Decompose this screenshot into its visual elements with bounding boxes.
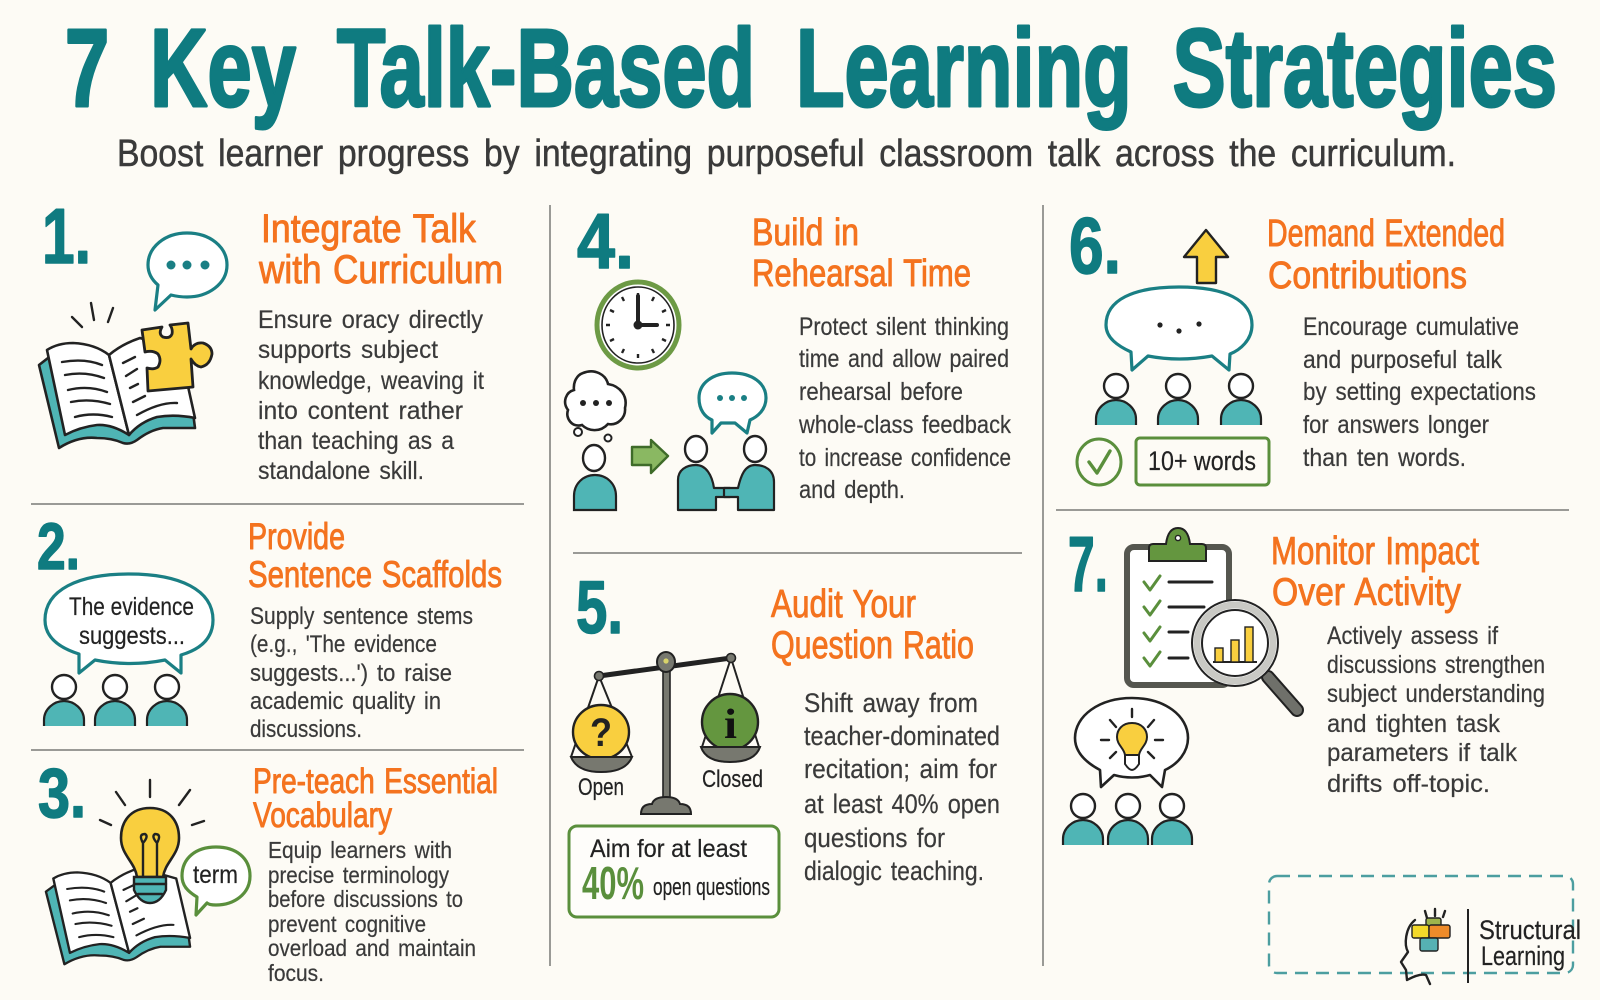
body text: discussions. [250, 716, 362, 743]
icon: learner thinking [574, 445, 616, 510]
body text: Equip learners with [268, 837, 452, 863]
body text: whole-class feedback [798, 411, 1011, 439]
arrow: yellow up [1184, 230, 1228, 283]
body text: at least 40% open [804, 789, 1000, 819]
heading: Contributions [1268, 255, 1467, 297]
callout: 40 percent target: Aim for at least [590, 835, 747, 863]
icon: green check [1077, 439, 1121, 485]
body text: overload and maintain [268, 935, 476, 961]
body text: and purposeful talk [1303, 346, 1502, 374]
icon: three learners [1063, 794, 1192, 845]
heading: Demand Extended [1267, 213, 1505, 255]
callout: 10+ words: 10+ words [1148, 446, 1256, 476]
body text: to increase confidence [799, 444, 1011, 472]
body text: Shift away from [804, 688, 978, 718]
body text: academic quality in [250, 688, 441, 715]
icon: term bubble [182, 847, 250, 915]
body text [804, 688, 1000, 886]
callout: 10+ words [1136, 438, 1269, 485]
callout: 40 percent target [569, 826, 779, 917]
heading [771, 583, 974, 667]
label: Open: Open [578, 774, 624, 801]
logo wordmark: Structural [1479, 915, 1581, 945]
panel: strategy 5 [569, 566, 1000, 917]
icon: pair of learners talking [678, 436, 774, 510]
body text: and depth. [799, 476, 905, 504]
icon: thought cloud [565, 371, 626, 442]
body text: suggests...') to raise [250, 660, 452, 687]
logo wordmark [1479, 915, 1581, 971]
callout: 40 percent target: 40% [582, 857, 644, 909]
body text [258, 306, 484, 485]
body text: by setting expectations [1303, 378, 1536, 406]
icon: clock [597, 282, 679, 368]
body text: than ten words. [1303, 444, 1466, 472]
heading [1271, 530, 1479, 614]
panel: strategy 1 [39, 192, 503, 485]
label: Closed: Closed [702, 766, 763, 793]
body text: drifts off-topic. [1327, 770, 1490, 798]
body text: parameters if talk [1327, 739, 1517, 767]
body text: and tighten task [1327, 710, 1500, 738]
icon: speech bubble with dots [699, 373, 766, 433]
icon: bubble with idea bulb [1075, 698, 1188, 787]
panel: strategy 7 [1063, 520, 1545, 845]
body text: dialogic teaching. [804, 856, 984, 886]
body text: precise terminology [268, 862, 449, 888]
body text: Encourage cumulative [1303, 313, 1519, 341]
icon: clipboard with magnifier [1127, 528, 1297, 710]
number 1: 1. [42, 192, 91, 280]
body text [1303, 313, 1536, 472]
body text: (e.g., 'The evidence [250, 631, 437, 658]
body text: supports subject [258, 336, 438, 364]
heading: with Curriculum [258, 248, 503, 292]
heading [752, 212, 971, 295]
icon: three learners [44, 675, 187, 726]
heading: Monitor Impact [1271, 530, 1479, 573]
number 7: 7. [1068, 520, 1108, 608]
body text: Protect silent thinking [799, 313, 1009, 341]
heading: Provide [248, 516, 345, 557]
body text: than teaching as a [258, 427, 454, 455]
heading [253, 762, 498, 835]
heading: Rehearsal Time [752, 253, 971, 295]
number 5: 5. [576, 566, 623, 649]
body text: recitation; aim for [804, 754, 997, 784]
body text: before discussions to [268, 886, 463, 912]
body text: subject understanding [1327, 680, 1545, 708]
icon: balance scale: ? [590, 711, 612, 755]
body text: discussions strengthen [1327, 651, 1545, 679]
body text: for answers longer [1303, 411, 1489, 439]
heading: Vocabulary [253, 796, 392, 835]
icon: large speech bubble [1106, 287, 1252, 370]
icon: term bubble: term [193, 861, 238, 889]
callout: 40 percent target: open questions [653, 874, 770, 901]
icon: speech bubble [148, 233, 227, 310]
icon: speech bubble with sentence stem: The evidence [69, 593, 194, 621]
icon: speech bubble with sentence stem [45, 574, 213, 673]
icon: head with blocks [1401, 909, 1450, 984]
body text: Actively assess if [1327, 622, 1498, 650]
body text: prevent cognitive [268, 911, 426, 937]
body text [798, 313, 1011, 504]
heading: Audit Your [771, 583, 916, 626]
body text [1327, 622, 1545, 798]
subtitle: Boost learner progress by integrating purposeful classroom talk across the curriculum. [117, 133, 1456, 175]
icon: balance scale: i [724, 702, 737, 748]
body text: Ensure oracy directly [258, 306, 483, 334]
heading: Sentence Scaffolds [248, 554, 502, 595]
panel: strategy 2 [37, 509, 502, 743]
body text [250, 603, 473, 743]
panel: Structural Learning logo [1269, 876, 1581, 984]
body text: time and allow paired [799, 345, 1009, 373]
heading [1267, 213, 1505, 297]
icon: balance scale [571, 652, 760, 814]
heading: Integrate Talk [261, 207, 477, 251]
number 4: 4. [577, 197, 634, 285]
body text: rehearsal before [799, 378, 963, 406]
heading: Pre-teach Essential [253, 762, 498, 801]
heading: Build in [752, 212, 859, 254]
body text: focus. [268, 960, 324, 986]
number 6: 6. [1069, 201, 1121, 290]
panel: strategy 4 [565, 197, 1011, 510]
icon: book with puzzle piece [39, 303, 212, 448]
body text: into content rather [258, 397, 463, 425]
body text [268, 837, 476, 986]
body text: standalone skill. [258, 457, 424, 485]
body text: Supply sentence stems [250, 603, 473, 630]
body text: knowledge, weaving it [258, 367, 484, 395]
body text: questions for [804, 823, 945, 853]
heading: Question Ratio [771, 624, 974, 667]
icon: speech bubble with sentence stem: suggests... [79, 622, 185, 650]
number 3: 3. [38, 754, 86, 832]
arrow: green [632, 440, 668, 473]
panel: strategy 6 [1069, 201, 1536, 485]
heading: Over Activity [1272, 571, 1461, 614]
icon: three learners [1096, 374, 1261, 425]
body text: teacher-dominated [804, 721, 1000, 751]
number 2: 2. [37, 509, 80, 583]
icon: book and light bulb [46, 780, 204, 964]
logo wordmark: Learning [1481, 941, 1565, 971]
heading [248, 516, 502, 595]
panel: strategy 3 [38, 754, 498, 986]
heading [258, 207, 503, 292]
